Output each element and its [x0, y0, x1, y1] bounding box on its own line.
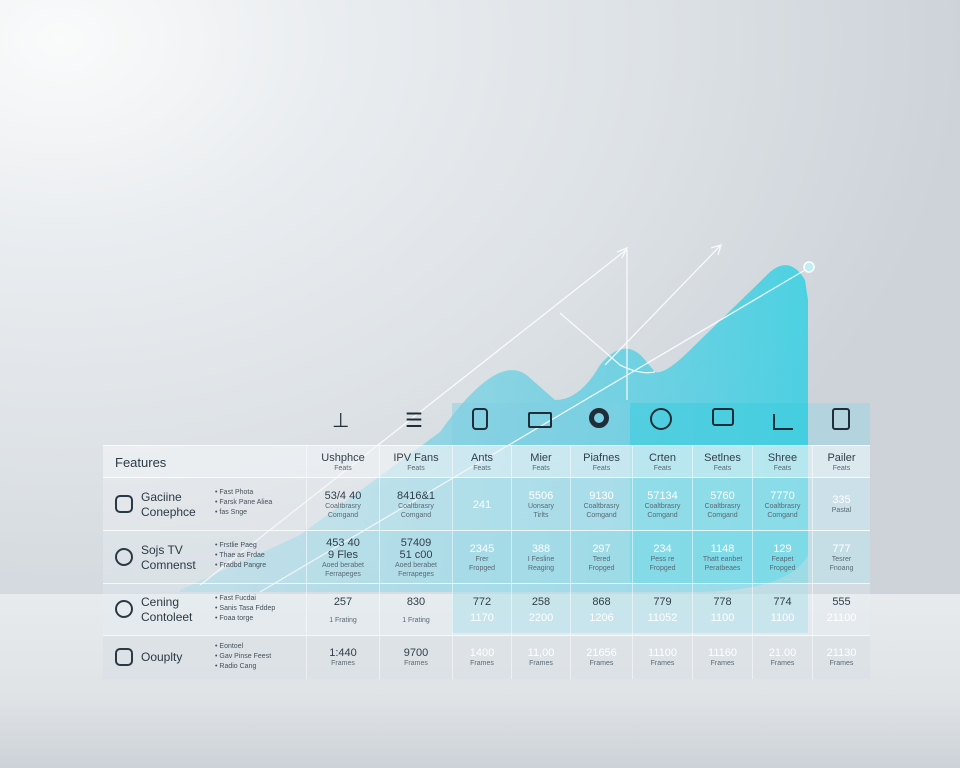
row 1: Comgand [328, 512, 358, 518]
header row: Feats [774, 464, 791, 472]
row 1: • fas Snge [215, 509, 247, 516]
row 2: • Thae as Frdae [215, 552, 265, 559]
header row [103, 445, 870, 478]
header row: Feats [593, 464, 610, 472]
row 2: Pess re [651, 556, 674, 562]
header row: Crten [649, 452, 676, 464]
row 4 [103, 635, 870, 679]
row 1: 241 [473, 498, 491, 510]
row 2: Fropged [649, 564, 676, 572]
header row: Features [115, 455, 166, 470]
row 4: 21.00 [769, 647, 796, 659]
row 4: Frames [590, 660, 613, 667]
text: ☰ [405, 410, 423, 432]
row 3: Contoleet [141, 610, 192, 624]
row 2: • Frstlie Paeg [215, 542, 257, 549]
row 1: 5506 [529, 490, 553, 502]
header row: Ants [471, 452, 493, 464]
header row: Feats [714, 464, 731, 472]
row 4: Frames [470, 660, 494, 667]
row 3: 1206 [589, 612, 614, 624]
row 3: 772 [473, 596, 491, 608]
row 1: Comgand [586, 512, 617, 518]
marker circle [804, 262, 814, 272]
row 3: 555 [832, 596, 851, 608]
header row: Piafnes [583, 452, 620, 464]
row 2: 9 Fles [328, 548, 358, 560]
row 1: 53/4 40 [325, 490, 361, 502]
row 3: 1170 [470, 612, 494, 624]
row 3: 778 [713, 596, 732, 608]
header row: Setlnes [704, 452, 741, 464]
row 4: Frames [404, 660, 428, 667]
row 1: Coaltbrasry [765, 502, 800, 510]
row 3: 774 [773, 596, 792, 608]
row 2 [103, 530, 870, 584]
row 4: Frames [651, 660, 674, 667]
header row: Feats [407, 464, 425, 472]
header row: Shree [768, 452, 797, 464]
row 2: Fropged [588, 564, 615, 572]
row 1: Tirlts [534, 512, 548, 518]
row 3: 830 [407, 596, 425, 608]
header row: Feats [334, 464, 352, 472]
row 1: 7770 [770, 490, 795, 502]
row 1: Pastal [832, 507, 851, 514]
row 1: • Fast Phota [215, 489, 253, 496]
row 2: 777 [832, 542, 851, 554]
row 4: 1:440 [329, 647, 357, 659]
row 2: Fnoang [830, 564, 853, 572]
row 4: 21656 [586, 647, 617, 659]
row 2: 2345 [470, 542, 494, 554]
row 2: Aoed berabet [395, 562, 437, 568]
row 3: 1100 [711, 612, 734, 624]
row 2: Ferrapeges [398, 570, 434, 578]
row 1: Comgand [647, 512, 678, 518]
row 4: 1400 [470, 647, 494, 659]
row 4: Frames [830, 660, 853, 667]
row 4: 21130 [827, 647, 856, 659]
row 2: Peratbeaes [705, 564, 740, 572]
row 4: • Radio Cang [215, 663, 256, 670]
row 2: Fropged [769, 564, 796, 572]
row 3: 11052 [648, 612, 677, 624]
row 4: Frames [529, 660, 553, 667]
row 1: Coaltbrasry [705, 502, 740, 510]
row 3: Cening [141, 595, 179, 609]
row 1: Coaltbrasry [645, 502, 680, 510]
row 4: Frames [771, 660, 794, 667]
header row: Feats [654, 464, 671, 472]
row 2: I Fesline [528, 556, 554, 562]
row 4: Frames [711, 660, 734, 667]
row 4: 11100 [648, 647, 677, 659]
row 3: 21100 [827, 612, 856, 624]
header icons [332, 408, 850, 432]
row 1: 335 [832, 494, 851, 506]
row 4: Oouplty [141, 650, 182, 664]
text: ⊥ [332, 410, 349, 432]
row 2: Aoed berabet [322, 562, 364, 568]
row 1: 9130 [589, 490, 614, 502]
header row: IPV Fans [393, 452, 439, 464]
row 2: Tesrer [832, 556, 851, 562]
row 1: 8416&1 [397, 490, 435, 502]
row 4: 11,00 [528, 647, 554, 659]
row 1: Coaltbrasry [325, 502, 361, 510]
row 4: Frames [331, 660, 355, 667]
row 3: 1 Frating [402, 616, 430, 624]
row 3 [103, 583, 870, 636]
row 2: Fropged [469, 564, 495, 572]
row 1: Gaciine [141, 490, 182, 504]
row 4: 11160 [708, 647, 737, 659]
row 2: Frer [476, 556, 488, 562]
row 1 [103, 477, 870, 531]
row 3: 257 [334, 596, 352, 608]
row 1: Comgand [401, 512, 431, 518]
row 2: Feapet [772, 556, 793, 562]
header row: Mier [530, 452, 552, 464]
row 1: Coaltbrasry [584, 502, 619, 510]
row 1: Uonsary [528, 502, 554, 510]
row 3: 258 [532, 596, 550, 608]
header row: Feats [833, 464, 850, 472]
row 3: • Sanis Tasa Fddep [215, 605, 275, 612]
row 3: • Foaa torge [215, 615, 253, 622]
row 3: 2200 [529, 612, 553, 624]
row 1: Comgand [767, 512, 798, 518]
row 3: 868 [592, 596, 611, 608]
row 4: • Eontoel [215, 643, 243, 650]
header row: Feats [532, 464, 550, 472]
row 2: 453 40 [326, 536, 360, 548]
row 1: Coaltbrasry [398, 502, 434, 510]
row 2: 51 c00 [399, 548, 433, 560]
row 2: • Fradbd Pangre [215, 562, 266, 569]
row 3: 1100 [771, 612, 794, 624]
row 3: • Fast Fucdai [215, 595, 256, 602]
header row: Pailer [827, 452, 856, 464]
row 2: Ferrapeges [325, 570, 361, 578]
row 2: Thatt eanbet [703, 556, 742, 562]
row 2: 129 [773, 542, 792, 554]
row 1: • Farsk Pane Aliea [215, 499, 272, 506]
row 4: • Gav Pinse Feest [215, 653, 271, 660]
row 2: 1148 [711, 542, 734, 554]
row 2: Tered [593, 556, 610, 562]
row 1: Comgand [707, 512, 738, 518]
row 1: 57134 [647, 490, 678, 502]
row 3: 1 Frating [329, 616, 357, 624]
row 2: 297 [592, 542, 611, 554]
header row: Feats [473, 464, 491, 472]
row 2: 234 [653, 542, 672, 554]
row 2: Comnenst [141, 558, 196, 572]
row 2: Sojs TV [141, 543, 183, 557]
row 2: 388 [532, 542, 550, 554]
header row: Ushphce [321, 452, 365, 464]
row 1: 5760 [710, 490, 735, 502]
row 2: 57409 [401, 536, 431, 548]
row 4: 9700 [404, 647, 428, 659]
row 2: Reaging [528, 564, 554, 572]
row 1: Conephce [141, 505, 196, 519]
row 3: 779 [653, 596, 672, 608]
table [103, 445, 870, 679]
